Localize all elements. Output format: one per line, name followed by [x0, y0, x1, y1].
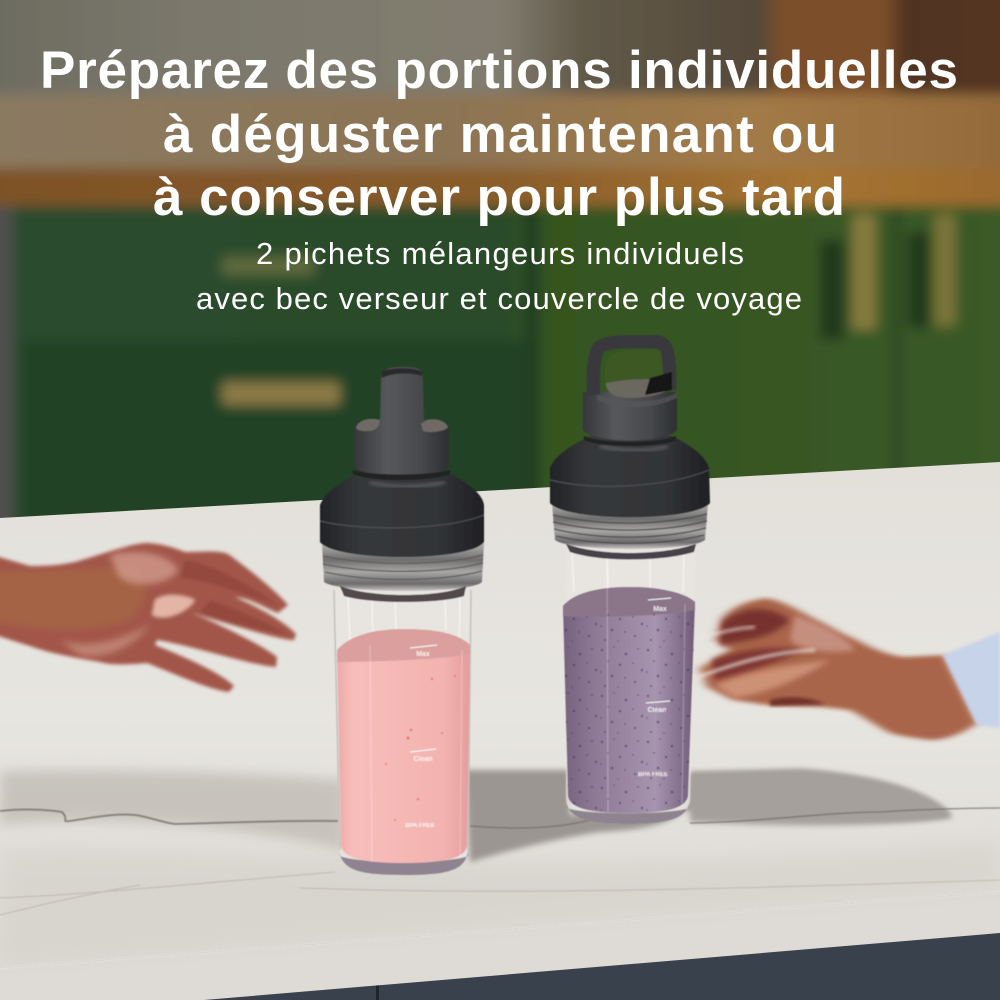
upper cap: [354, 367, 449, 476]
measurement marks: Clean: [413, 756, 433, 763]
threaded ring: [552, 503, 708, 549]
slate base below the counter: [0, 925, 1000, 1000]
title: [40, 41, 958, 227]
upper cap with handle: [583, 392, 677, 440]
measurement marks: Clean: [647, 707, 667, 714]
subtitle: 2 pichets mélangeurs individuels: [256, 236, 744, 271]
left bottle: [320, 367, 484, 875]
title: à déguster maintenant ou: [163, 105, 837, 164]
subtitle: avec bec verseur et couvercle de voyage: [196, 281, 802, 316]
subtitle: [196, 236, 802, 316]
black lid: [550, 436, 710, 517]
right bottle: [550, 342, 710, 824]
measurement marks: BPA FREE: [638, 772, 668, 778]
measurement marks: BPA FREE: [405, 823, 435, 829]
measurement marks: Max: [416, 651, 430, 658]
pink smoothie: [337, 629, 470, 863]
purple smoothie: [563, 587, 695, 813]
left hand (motion blurred): [0, 543, 296, 692]
jar body: [334, 590, 471, 875]
threaded ring: [322, 543, 484, 591]
measurement marks: Max: [653, 606, 667, 613]
measurement marks: [638, 598, 671, 778]
right hand and sleeve (motion blurred): [696, 598, 1000, 740]
marble countertop: [0, 462, 1000, 1000]
table shadows: [0, 770, 952, 862]
blue sleeve: [943, 632, 1000, 728]
title: Préparez des portions individuelles: [40, 41, 958, 100]
marble veins: [0, 808, 1000, 915]
fruit specks: [385, 675, 456, 821]
blueberry specks: [563, 612, 695, 813]
black lid: [320, 472, 484, 557]
jar body: [566, 546, 696, 824]
measurement marks: [405, 645, 437, 829]
title: à conserver pour plus tard: [153, 168, 845, 227]
